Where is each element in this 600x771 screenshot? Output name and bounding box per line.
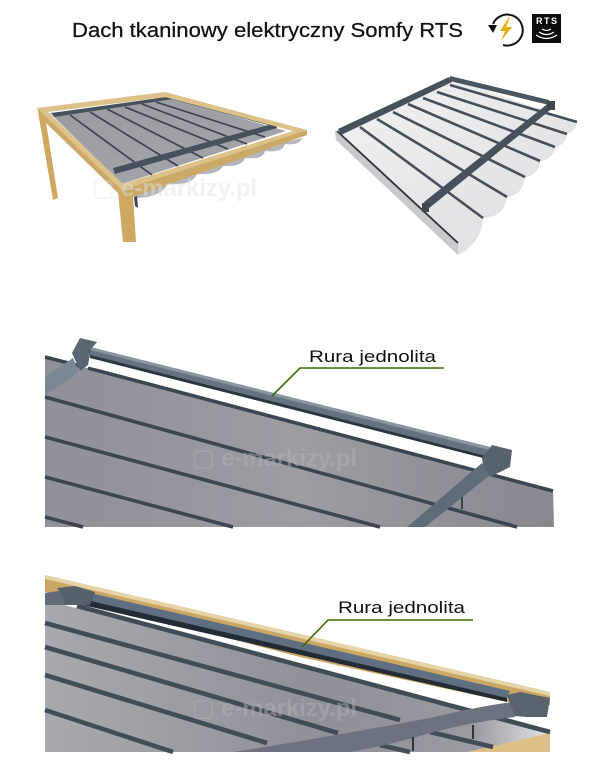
fabric xyxy=(45,600,550,752)
brackets xyxy=(422,203,429,212)
watermark: ▢ e-markizy.pl xyxy=(192,445,357,472)
screws xyxy=(412,725,474,751)
panel: close-up rod without frame xyxy=(45,338,554,527)
scalloped fabric below the beam xyxy=(135,138,302,198)
front rod xyxy=(113,123,277,174)
slats xyxy=(45,357,553,527)
tube shadow xyxy=(78,598,507,702)
cross rod xyxy=(233,702,515,752)
cross rod right xyxy=(407,463,490,527)
right bracket xyxy=(482,445,512,477)
side rod xyxy=(171,96,273,126)
fabric end hook xyxy=(134,196,138,208)
right rod xyxy=(424,102,554,209)
right bracket xyxy=(507,692,550,717)
white gap above the first slat xyxy=(80,357,487,462)
wooden rear leg xyxy=(38,112,58,200)
back rod xyxy=(450,76,549,105)
left rod xyxy=(338,77,452,135)
fabric xyxy=(45,357,554,527)
back rod xyxy=(52,96,173,117)
wood bottom right xyxy=(467,733,550,752)
left cross rod xyxy=(45,590,65,605)
panel: pergola with wooden frame xyxy=(37,92,307,242)
slats xyxy=(360,85,577,218)
panel: close-up rod with wooden frame xyxy=(45,575,550,752)
label: Rura jednolita xyxy=(309,347,437,366)
fabric slats xyxy=(70,102,265,175)
fabric surface xyxy=(335,78,577,255)
screw xyxy=(461,497,463,509)
panel: roof without frame xyxy=(335,76,577,255)
leader line xyxy=(272,368,444,396)
fabric roof xyxy=(50,98,286,184)
cross rod left xyxy=(45,358,79,394)
slats xyxy=(45,606,550,752)
wood highlight xyxy=(45,575,550,696)
wooden frame xyxy=(37,92,307,190)
tube shadow xyxy=(90,354,487,459)
wooden beam xyxy=(45,575,550,705)
title: Dach tkaninowy elektryczny Somfy RTS xyxy=(72,20,463,42)
left bracket xyxy=(72,338,97,371)
left bracket xyxy=(57,586,95,605)
leader line xyxy=(302,620,473,647)
side edge strip xyxy=(335,130,458,255)
icon: motor rotation with lightning bolt xyxy=(488,15,523,46)
watermark: ▢ e-markizy.pl xyxy=(192,695,357,722)
wooden front leg xyxy=(118,192,136,242)
label: Rura jednolita xyxy=(338,598,466,617)
tube Rura jednolita xyxy=(78,590,510,698)
watermark: ▢ e-markizy.pl xyxy=(92,175,257,202)
icon: RTS radio badge: RTS xyxy=(536,16,557,26)
tube Rura jednolita xyxy=(90,347,490,456)
icon: RTS radio badge xyxy=(532,14,561,43)
frame side face xyxy=(37,108,307,197)
